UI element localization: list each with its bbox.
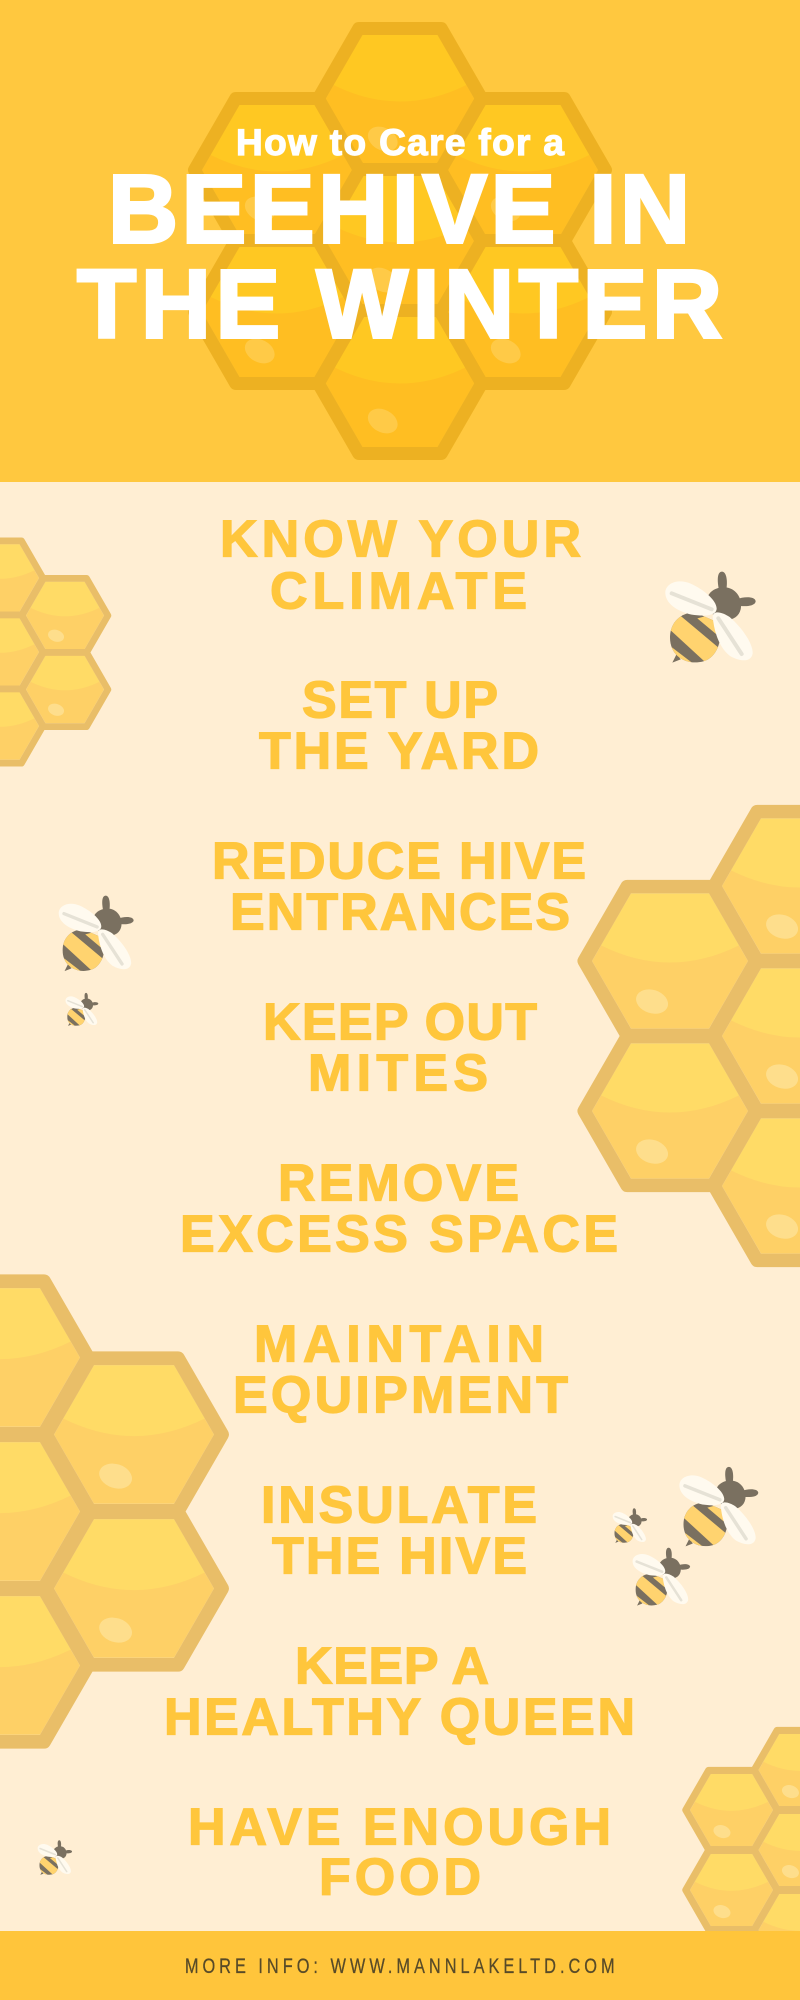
heading: have enough food: FOOD	[319, 1848, 481, 1906]
heading: remove excess space: EXCESS SPACE	[180, 1206, 618, 1264]
panel: header	[0, 0, 800, 482]
heading: know your climate: CLIMATE	[270, 562, 527, 620]
icon: honeycomb bottom right	[686, 1730, 800, 1970]
heading: maintain equipment: EQUIPMENT	[233, 1366, 568, 1424]
heading: reduce hive entrances	[212, 832, 586, 942]
icon: header honeycomb	[194, 29, 606, 453]
heading: maintain equipment	[233, 1316, 568, 1424]
heading: remove excess space	[180, 1154, 618, 1264]
icon: honeycomb upper left	[0, 541, 108, 763]
icon: bee lower right small	[613, 1508, 647, 1544]
icon: honeycomb right	[584, 812, 800, 1260]
footer text: MORE INFO: WWW.MANNLAKELTD.COM	[185, 1954, 615, 1977]
icon: honeycomb lower left	[0, 1281, 222, 1742]
heading: keep out mites: MITES	[308, 1044, 488, 1102]
heading: insulate the hive: THE HIVE	[272, 1528, 527, 1586]
icon: bee left	[59, 896, 134, 974]
heading: keep a healthy queen: KEEP A	[295, 1638, 489, 1696]
heading: maintain equipment: MAINTAIN	[254, 1316, 544, 1374]
heading: remove excess space: REMOVE	[278, 1154, 519, 1212]
heading: set up the yard: THE YARD	[259, 722, 539, 780]
title	[77, 122, 722, 358]
heading: set up the yard	[259, 672, 539, 780]
heading: keep a healthy queen: HEALTHY QUEEN	[164, 1688, 635, 1746]
heading: have enough food	[188, 1798, 611, 1906]
heading: set up the yard: SET UP	[302, 672, 498, 730]
panel: body background	[0, 482, 800, 1931]
icon: small bee left	[65, 993, 98, 1027]
heading: reduce hive entrances: ENTRANCES	[230, 884, 570, 942]
title line 2: THE WINTER	[77, 250, 722, 358]
icon: bee lower right medium	[633, 1548, 690, 1608]
heading: keep out mites: KEEP OUT	[263, 994, 537, 1052]
icon: bee bottom left	[38, 1840, 72, 1876]
heading: reduce hive entrances: REDUCE HIVE	[212, 832, 586, 890]
heading: know your climate: KNOW YOUR	[220, 510, 581, 568]
icon: bee lower right large	[679, 1467, 758, 1550]
subtitle: How to Care for a	[236, 122, 564, 163]
heading: have enough food: HAVE ENOUGH	[188, 1798, 611, 1856]
icon: bee top right	[665, 572, 756, 667]
panel: footer	[0, 1931, 800, 2000]
heading: keep a healthy queen	[164, 1638, 635, 1746]
heading: insulate the hive: INSULATE	[261, 1476, 537, 1534]
heading: know your climate	[220, 510, 581, 620]
heading: keep out mites	[263, 994, 537, 1102]
heading: insulate the hive	[261, 1476, 537, 1586]
title line 1: BEEHIVE IN	[108, 154, 690, 264]
